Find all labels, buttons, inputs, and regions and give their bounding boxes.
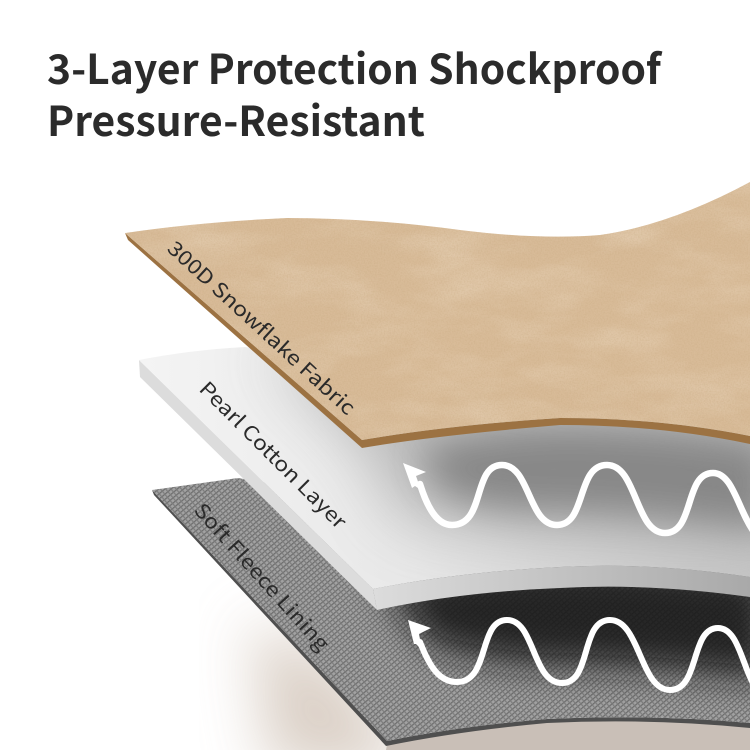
fleece shading [380,562,750,680]
pearl shading [260,350,750,546]
cast shadow under the layers [250,620,750,750]
pearl surface [139,347,750,589]
title [47,36,663,148]
layer: pearl cotton [139,347,750,610]
label: pearl cotton layer: Pearl Cotton Layer [194,374,354,534]
label: soft fleece lining: Soft Fleece Lining [189,496,337,656]
label: 300D snowflake fabric: 300D Snowflake Fabric [162,233,363,421]
fabric surface [125,182,750,440]
fleece surface [152,478,750,741]
layer: 300D snowflake fabric [120,175,750,450]
wave arrow: pearl [403,463,750,533]
fabric front edge [125,233,750,448]
layer: soft fleece lining [152,478,750,746]
fabric texture [120,175,750,450]
title: Pressure-Resistant [47,88,425,148]
pearl side edge [139,360,377,610]
pearl front edge [373,566,750,610]
wave arrow: fleece [408,620,750,690]
title: 3-Layer Protection Shockproof [47,36,663,96]
fleece front edge [152,490,750,746]
